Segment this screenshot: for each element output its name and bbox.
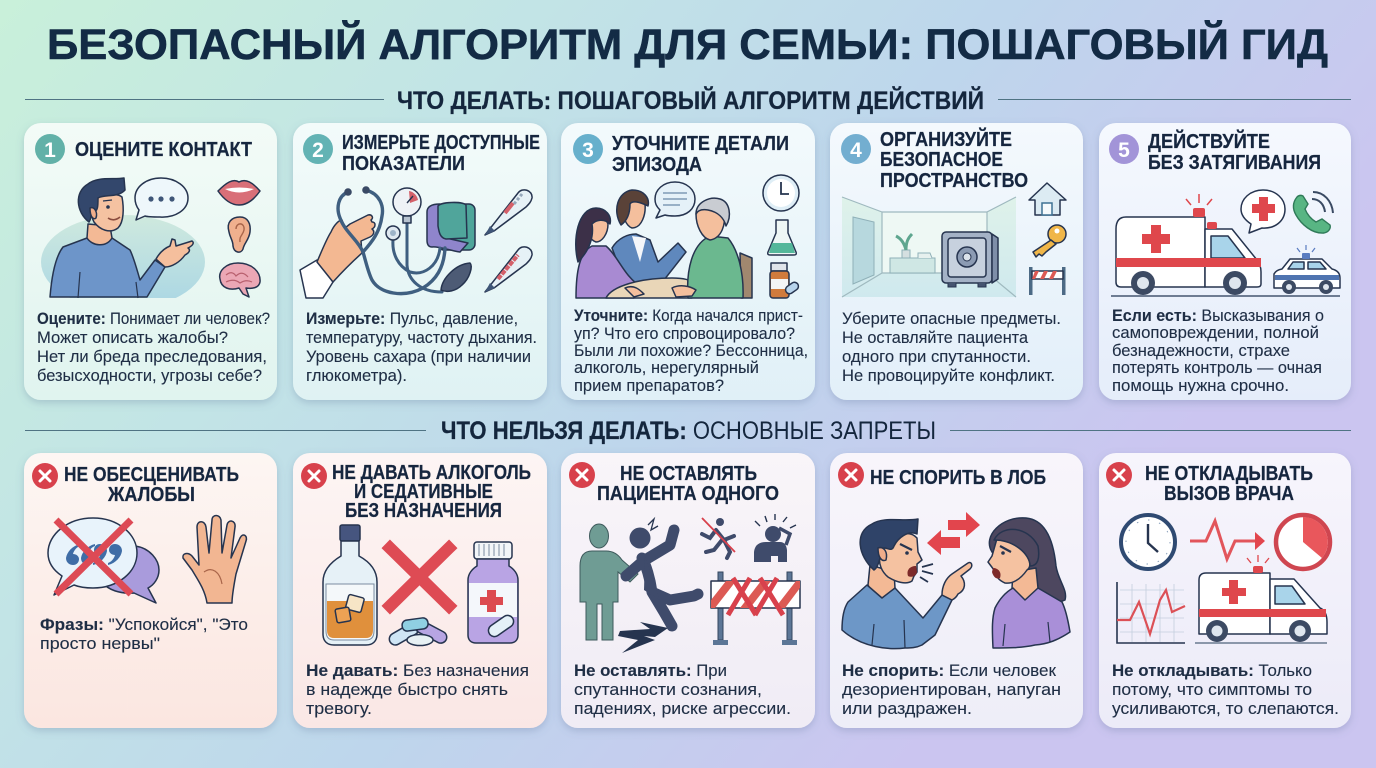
step 2 text: температуру, частоту дыхания. [306,328,537,347]
panel: step 5 act without delay [1099,123,1351,400]
icon: medical bubble [1241,190,1285,233]
step 4 text: Не оставляйте пациента [842,328,1029,347]
text [1112,661,1339,718]
step 5 badge [1109,134,1139,164]
step 5 text: самоповреждении, полной [1112,323,1319,342]
step 5 text: помощь нужна срочно. [1112,376,1289,395]
step 5 heading: БЕЗ ЗАТЯГИВАНИЯ [1148,152,1321,174]
step 4 badge [841,134,871,164]
heading: ЖАЛОБЫ [107,484,195,506]
step 3 text: уп? Что его спровоцировало? [574,324,795,343]
illustration: safe room [842,197,1016,297]
text [306,661,529,718]
step 5 text: потерять контроль — очная [1112,358,1322,377]
heading: НЕ ОСТАВЛЯТЬ [620,463,757,485]
heading: НЕ ДАВАТЬ АЛКОГОЛЬ [332,462,531,484]
step 2 text [306,309,537,385]
step 1 heading: ОЦЕНИТЕ КОНТАКТ [75,139,252,161]
icon: fall prohibited [702,518,735,558]
prohibition badge [1106,462,1132,488]
step 4 heading [880,127,1028,192]
heading: ВЫЗОВ ВРАЧА [1164,483,1294,505]
text: Не давать: Без назначения [306,661,529,680]
step 2 text: Измерьте: Пульс, давление, [306,309,518,328]
icon: medicine jar [468,542,518,643]
prohibition badge [301,463,327,489]
step 4 text: Не провоцируйте конфликт. [842,366,1055,385]
icon: pill bottle [770,263,800,298]
illustration: man arguing [842,519,972,649]
step 2 badge: 2 [312,139,324,162]
icon: clock [1121,515,1175,569]
step 2 heading: ИЗМЕРЬТЕ ДОСТУПНЫЕ [342,132,540,154]
step 3 text: прием препаратов? [574,376,724,395]
section heading: what not to do: ЧТО НЕЛЬЗЯ ДЕЛАТЬ: ОСНОВНЫЕ ЗАПРЕТЫ [441,417,936,445]
step 1 badge [35,134,65,164]
step 3 text: Уточните: Когда начался прист- [574,306,803,325]
illustration: ambulance [1111,194,1340,296]
step 1 text: Оцените: Понимает ли человек? [37,309,270,328]
icon: pulse arrow [1190,521,1265,559]
panel: do not leave patient alone [561,453,815,728]
heading: НЕ СПОРИТЬ В ЛОБ [870,467,1046,489]
text: дезориентирован, напуган [842,680,1061,699]
text [574,661,791,718]
step 4 badge: 4 [850,139,862,162]
text: спутанности сознания, [574,680,762,699]
text: Не спорить: Если человек [842,661,1057,680]
step 3 text [574,306,808,395]
heading [332,462,531,522]
illustration: person falling with helper [580,519,698,653]
illustration: stethoscope and tonometer [300,186,475,298]
heading: НЕ ОТКЛАДЫВАТЬ [1145,463,1313,485]
icon: key [1033,225,1066,257]
panel: do not dismiss complaints [24,453,277,728]
icon: head pain [754,514,796,562]
step 4 heading: ОРГАНИЗУЙТЕ [880,127,1012,151]
step 3 heading: ЭПИЗОДА [612,154,702,176]
text: падениях, риске агрессии. [574,699,791,718]
step 5 badge: 5 [1118,139,1130,162]
heading: ПАЦИЕНТА ОДНОГО [597,483,779,505]
step 3 heading: УТОЧНИТЕ ДЕТАЛИ [612,133,789,155]
panel: step 2 measure [293,123,547,400]
step 5 text: Если есть: Высказывания о [1112,306,1324,325]
step 3 heading [612,133,789,176]
heading: И СЕДАТИВНЫЕ [354,481,493,503]
step 3 text: Были ли похожие? Бессонница, [574,341,808,360]
step 1 text [37,309,270,385]
panel: step 4 safe space [830,123,1083,400]
text: тревогу. [306,699,372,718]
panel: no alcohol or sedatives [293,453,547,728]
text: Не оставлять: При [574,661,727,680]
text [40,615,248,653]
step 5 text [1112,306,1324,395]
step 2 text: Уровень сахара (при наличии [306,347,531,366]
icon: lips [218,181,260,205]
icon: conflict arrows [927,512,980,555]
heading: БЕЗ НАЗНАЧЕНИЯ [345,500,502,522]
icon: flask [768,220,796,255]
heading [597,463,779,505]
step 4 text: Уберите опасные предметы. [842,309,1061,328]
icon: chat bubble [655,182,695,218]
section heading: what to do: ЧТО ДЕЛАТЬ: ПОШАГОВЫЙ АЛГОРИТМ ДЕЙСТВИЙ [397,85,984,115]
step 1 text: безысходности, угрозы себе? [37,366,262,385]
icon: red timer [1276,515,1330,569]
icon: ear [228,217,250,252]
text: просто нервы" [40,634,160,653]
panel: do not argue [830,453,1083,728]
text: Не откладывать: Только [1112,661,1312,680]
text [842,661,1061,718]
icon: barrier [1029,267,1066,295]
text: или раздражен. [842,699,972,718]
icon: stop hand [183,516,246,603]
text: усиливаются, то слепаются. [1112,699,1339,718]
icon: phone [1293,192,1333,233]
illustration: woman arguing [988,518,1070,648]
step 4 heading: БЕЗОПАСНОЕ [880,149,1003,171]
icon: house [1029,183,1066,215]
step 4 heading: ПРОСТРАНСТВО [880,170,1028,192]
step 2 heading [342,132,540,175]
icon: crossed barrier [711,572,800,645]
illustration: family conversation [576,190,752,298]
step 2 badge [303,134,333,164]
step 3 text: алкоголь, нерегулярный [574,358,759,377]
heading [1145,463,1313,505]
text: потому, что симптомы то [1112,680,1312,699]
icon: brain [220,263,260,297]
step 1 text: Может описать жалобы? [37,328,228,347]
illustration: man talking [41,178,205,309]
panel: do not delay calling a doctor [1099,453,1351,728]
prohibition badge [838,462,864,488]
step 1 text: Нет ли бреда преследования, [37,347,267,366]
panel: step 1 assess contact [24,123,277,400]
heading: НЕ ОБЕСЦЕНИВАТЬ [64,464,239,486]
prohibition badge [569,462,595,488]
illustration: ambulance [1195,555,1327,643]
title: БЕЗОПАСНЫЙ АЛГОРИТМ ДЛЯ СЕМЬИ: ПОШАГОВЫЙ ГИД [47,20,1328,69]
step 2 text: глюкометра). [306,366,407,385]
step 5 heading [1148,129,1321,174]
text: в надежде быстро снять [306,680,508,699]
icon: thermometer [485,190,532,235]
icon: speech bubble [135,178,188,220]
icon: pills [387,617,449,647]
step 3 badge [573,134,603,164]
step 4 text [842,309,1061,385]
step 2 heading: ПОКАЗАТЕЛИ [342,153,465,175]
icon: red cross mark [390,548,449,606]
icon: thermometer 2 [485,247,532,292]
text: Фразы: "Успокойся", "Это [40,615,248,634]
prohibition badge [32,463,58,489]
step 1 badge: 1 [44,139,56,162]
step 5 heading: ДЕЙСТВУЙТЕ [1148,129,1270,153]
step 5 text: безнадежности, страхе [1112,341,1290,360]
chart: heartbeat [1117,582,1185,643]
icon: bottle [323,525,377,645]
step 4 text: одного при спутанности. [842,347,1031,366]
heading [64,464,239,506]
panel: step 3 clarify [561,123,815,400]
step 3 badge: 3 [582,139,594,162]
icon: police car [1274,245,1340,294]
icon: clock [763,175,799,211]
icon: crossed out speech bubbles [48,518,159,603]
